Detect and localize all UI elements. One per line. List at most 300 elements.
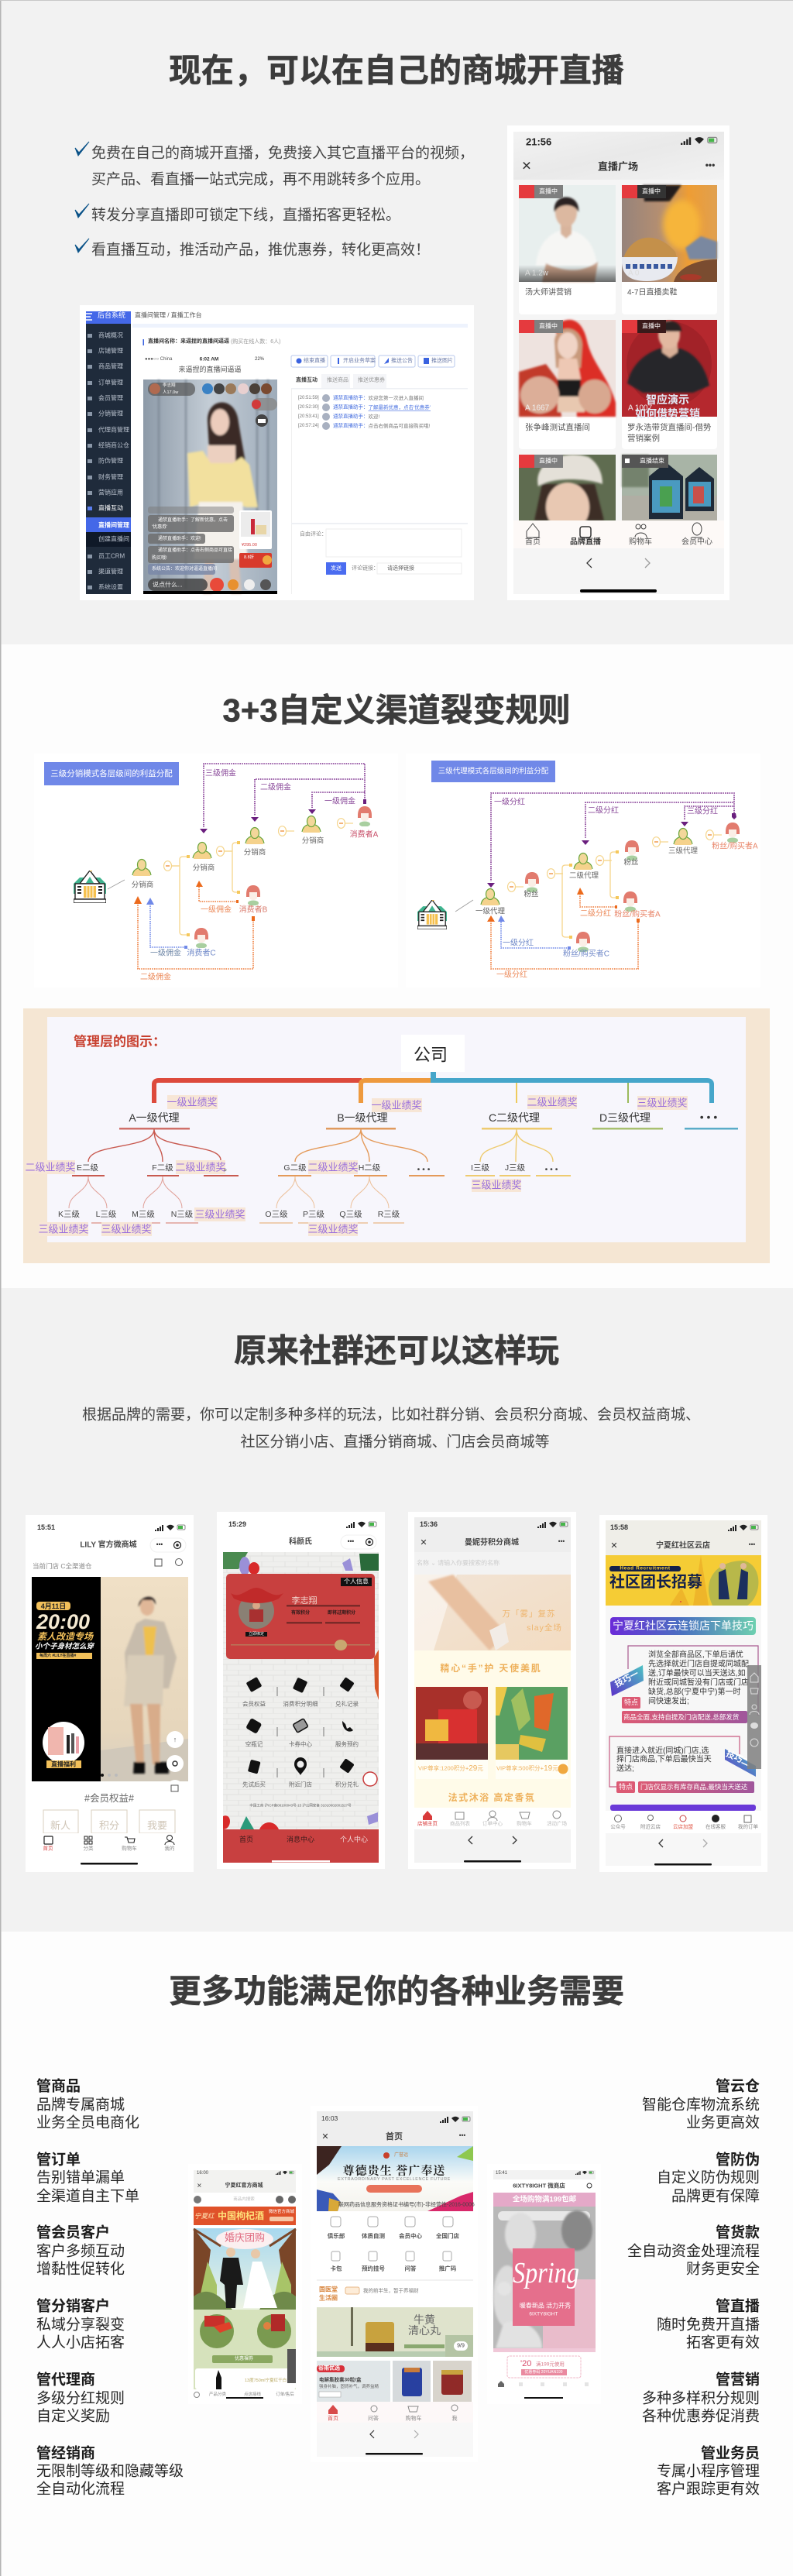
LILY member tiles: 积分	[99, 1820, 119, 1831]
pink promo bar	[493, 2193, 596, 2207]
card: lanterns	[622, 455, 717, 520]
minus circles	[508, 830, 722, 891]
sidebar: 渠道管理	[98, 567, 123, 575]
backend action buttons: 推送图片	[431, 356, 453, 364]
first level nodes	[119, 1095, 738, 1129]
sidebar: 营销应用	[98, 488, 123, 496]
text block: left feature list: 全自动化流程	[36, 2480, 125, 2497]
card: red banner speaker: 如何借势营销	[635, 407, 700, 420]
tip two: 择门店商品,下单后最快当天	[616, 1753, 712, 1764]
spring hero: 暖春新品 活力开秀	[520, 2302, 571, 2310]
text block: right feature list: 客户跟踪更有效	[657, 2480, 760, 2497]
card: hostess: A 1667	[525, 404, 550, 412]
phone: Ningxia community store: 宁夏红社区云店	[656, 1540, 710, 1551]
purple commission routes: 一级佣金	[324, 796, 355, 805]
phone: pharmacy home: 首页	[386, 2131, 403, 2142]
mall tab bar: 产品分类	[209, 2391, 226, 2397]
pink promo bar: 全场购物满199包邮	[513, 2195, 577, 2204]
icon: check 2	[75, 204, 89, 218]
first level nodes: D三级代理	[599, 1111, 651, 1124]
orange and blue return routes: 一级佣金	[150, 948, 181, 957]
agents	[475, 829, 698, 915]
text block: right feature list: 智能仓库物流系统	[642, 2096, 760, 2113]
distributors: 分销商	[193, 863, 215, 872]
spring hero: Spring	[513, 2257, 579, 2289]
text block: left feature list: 无限制等级和隐藏等级	[36, 2463, 184, 2480]
first level nodes: C二级代理	[489, 1111, 540, 1124]
text block: community intro: 根据品牌的需要，你可以定制多种多样的玩法，比如社群分销、会员积分商城、会员权益商城、	[82, 1406, 700, 1424]
third level nodes: M三级	[132, 1210, 155, 1219]
backend tabs and messages: [20:51:59]	[298, 396, 319, 400]
card: speaker	[519, 185, 616, 314]
orange and blue return routes: 一级佣金	[201, 905, 232, 914]
consumers: 消费者A	[350, 829, 379, 840]
sidebar: 分销管理	[98, 409, 123, 417]
tip one: 间快速发出;	[648, 1696, 689, 1705]
sidebar: 会员管理	[98, 393, 123, 401]
pharmacy tab bar: 我	[452, 2415, 457, 2421]
tip one: 缺货,总部(宁夏中宁)第一时	[648, 1687, 740, 1696]
yellow tree connectors	[108, 841, 240, 936]
third level nodes: 三级业绩奖	[38, 1224, 89, 1235]
phone: Kiehl's membership: •••	[348, 1538, 354, 1544]
pharmacy tab bar: 购物车	[406, 2415, 421, 2421]
sidebar: 财务管理	[98, 472, 123, 480]
phone: Maniform points mall: 曼妮芬积分商城	[465, 1537, 519, 1547]
sidebar: 系统设置	[98, 582, 123, 590]
pharmacy tab bar: 首页	[328, 2415, 338, 2421]
fans and buyers: 粉丝	[623, 858, 639, 867]
pharmacy hero: 尊德贵生 誉广奉送	[343, 2162, 445, 2178]
tab bar: 首页	[525, 536, 541, 547]
second level nodes: G二级	[283, 1163, 307, 1173]
backend tabs and messages: 推送商品	[327, 376, 348, 383]
community tab bar	[606, 1811, 761, 1833]
backend action buttons: 结束直播	[304, 356, 325, 364]
backend phone preview: 通禁直播助手：点击右侧商品可直接	[158, 547, 232, 553]
tab bar: 购物车	[629, 536, 652, 547]
red wine banner: 微信官方商城	[269, 2208, 295, 2214]
pharmacy notice row: 国医堂	[319, 2285, 338, 2293]
green product panel	[194, 2310, 296, 2389]
icon: store building	[417, 898, 447, 929]
pharmacy icon grid	[317, 2217, 473, 2281]
membership icon grid: 附近门店	[289, 1780, 312, 1788]
community tab bar: 附近云店	[640, 1823, 661, 1829]
cream promo strip with products: VIP尊享:500积分+19元	[496, 1764, 558, 1772]
community tab bar: 公众号	[610, 1823, 626, 1829]
backend phone preview: 8.8折	[244, 554, 255, 560]
distributors	[132, 816, 324, 889]
backend tabs and messages: 评论链接：	[352, 564, 379, 572]
card: food: A 0	[628, 270, 640, 277]
text block: right feature list: 管云仓	[716, 2077, 760, 2094]
backend phone preview: ¥295.00	[242, 543, 257, 548]
sidebar: 商城概况	[98, 331, 123, 339]
third level nodes: 三级业绩奖	[101, 1224, 152, 1235]
third level nodes: O三级	[265, 1210, 288, 1219]
tip two: 直接进入就近(同城)门店,选	[616, 1746, 709, 1755]
backend phone preview: 通禁直播助手：欢迎!	[158, 535, 201, 541]
heading tag: 三级分销模式各层级间的利益分配	[50, 768, 173, 778]
Kiehl's tab bar: 首页	[239, 1835, 253, 1843]
store tab bar	[498, 2381, 589, 2399]
card: red banner speaker: 营销案例	[627, 433, 660, 443]
second level nodes	[25, 1160, 571, 1192]
pharmacy icon grid: 全国门店	[436, 2232, 459, 2240]
fans and buyers: 粉丝/购买者A	[614, 909, 661, 919]
product tiles	[317, 2361, 472, 2402]
text block: left feature list: 业务全员电商化	[36, 2114, 139, 2131]
tips heading bar	[610, 1617, 756, 1635]
backend phone preview: ●●●○○ China	[145, 357, 173, 362]
text block: left feature list: 人人小店拓客	[36, 2334, 125, 2351]
third level nodes: 三级业绩奖	[307, 1224, 359, 1235]
card: food: 直播中	[642, 187, 661, 195]
member card: 李志翔	[291, 1595, 318, 1606]
cosmetic hero	[414, 1575, 571, 1650]
panel: live plaza phone: 直播广场	[598, 161, 638, 172]
LILY hero banner: 每周六 #LILY在直播#	[39, 1653, 77, 1658]
mall tab bar: 点这接线	[244, 2391, 261, 2397]
text block: left feature list: 管订单	[36, 2150, 81, 2169]
tip two: 特点	[619, 1782, 633, 1791]
pharmacy hero	[317, 2146, 475, 2211]
consumers	[187, 806, 379, 957]
membership icon grid: 会员权益	[242, 1699, 266, 1707]
text block: live streaming benefits: 看直播互动，推活动产品，推优惠券，转化更高效！	[91, 242, 430, 259]
LILY hero banner	[32, 1577, 188, 1797]
phone: Ningxia official mall: 16:00	[197, 2171, 209, 2176]
backend phone preview: 说点什么...	[153, 581, 183, 589]
sidebar: 创建直播间	[98, 534, 129, 542]
text block: left feature list: 管商品	[36, 2077, 81, 2094]
tip one: 附近或同城暂没有门店或门店	[648, 1678, 749, 1687]
backend phone preview: 6:02 AM	[200, 356, 218, 362]
recruitment banner: 社区团长招募	[609, 1573, 702, 1591]
backend tabs and messages: 直播互动	[296, 376, 318, 383]
backend tabs and messages: 自由评论：	[300, 530, 327, 538]
card: red banner speaker	[622, 320, 717, 449]
panel: live plaza phone: •••	[705, 160, 715, 170]
green product panel: 13度750ml宁夏红干白	[245, 2377, 287, 2383]
backend phone preview: 通禁直播助手：了解新优惠，点击	[158, 517, 228, 523]
pharmacy icon grid: 体质自测	[362, 2232, 385, 2240]
tip one: 先选择就近门店自提或同城配	[648, 1659, 749, 1668]
phone: Kiehl's membership	[217, 1512, 385, 1869]
LILY hero banner: 20:00	[36, 1610, 90, 1633]
pharmacy tab bar: 问答	[368, 2415, 379, 2421]
second level nodes: • • •	[417, 1165, 431, 1174]
nav arrows and home bar	[654, 1839, 712, 1865]
Maniform tab bar: 购物车	[517, 1820, 532, 1826]
third level nodes: Q三级	[339, 1210, 362, 1219]
card: red banner speaker: 罗永浩带货直播间-借势	[627, 422, 712, 432]
membership icon grid: 服务预约	[335, 1740, 359, 1747]
Kiehl's tab bar: 消息中心	[287, 1835, 314, 1843]
backend tabs and messages: 推送优惠券	[358, 376, 385, 383]
title: live streaming: 现在，可以在自己的商城开直播	[169, 53, 624, 88]
backend phone preview: 购买哦!	[152, 555, 167, 561]
text block: left feature list: 全渠道自主下单	[36, 2187, 139, 2204]
text block: left feature list: 管分销客户	[36, 2297, 110, 2314]
text block: right feature list: 管直播	[716, 2297, 760, 2314]
Kiehl's tab bar: 个人中心	[340, 1835, 368, 1843]
LILY member tiles: 新人	[50, 1820, 70, 1831]
phone: Ningxia official mall: ✕	[197, 2183, 202, 2189]
phone: 6IXTY8IGHT store: 15:41	[496, 2171, 508, 2176]
orange and blue return routes: 二级佣金	[140, 971, 171, 982]
pharmacy icon grid: 卡包	[330, 2265, 342, 2272]
product tiles: 强身补脑，固肾补气，调养益精	[319, 2383, 379, 2389]
LILY hero banner: 小个子身材怎么穿	[35, 1642, 94, 1651]
purple dividend routes	[487, 793, 736, 888]
purple dividend routes: 三级分红	[687, 805, 718, 816]
text block: right feature list: 各种优惠券促消费	[642, 2407, 760, 2424]
chart heading: 管理层的图示：	[74, 1033, 166, 1049]
card: speaker: 直播中	[539, 187, 558, 195]
LILY hero banner: 素人改造专场	[37, 1631, 94, 1642]
title: channel rules: 3+3自定义渠道裂变规则	[222, 692, 571, 728]
backend action buttons: 推送公告	[391, 356, 413, 364]
Maniform tab bar	[414, 1808, 571, 1829]
nav arrows and home bar	[580, 558, 657, 592]
fans and buyers: 粉丝	[524, 889, 539, 898]
fans and buyers: 粉丝/购买者C	[563, 948, 609, 959]
tip two: 门店仅显示有库存商品,最快当天送达	[640, 1783, 748, 1791]
backend tabs and messages: 通禁直播助手：了解最新优惠，点击'优惠券'	[333, 403, 431, 410]
second level nodes: • • •	[545, 1165, 558, 1174]
phone: Maniform points mall	[408, 1512, 576, 1869]
text block: right feature list: 自定义防伪规则	[657, 2169, 760, 2186]
panel: live console backend screenshot: 直播间名称：来逼捏的直播间逼逼 (购买在线人数：6人)	[148, 338, 281, 344]
text block: left feature list: 增黏性促转化	[36, 2260, 125, 2277]
card: red banner speaker: 智应演示	[646, 393, 689, 406]
icon: check 3	[75, 239, 89, 252]
tip two: 技巧二	[724, 1748, 752, 1768]
sidebar: 代理商管理	[98, 426, 129, 434]
sidebar: 员工CRM	[98, 553, 125, 559]
second level nodes: J三级	[505, 1163, 526, 1173]
text block: left feature list: 管经销商	[36, 2444, 95, 2461]
panel: management org chart	[23, 1008, 770, 1263]
text block: live streaming benefits: 免费在自己的商城开直播，免费接入其它直播平台的视频，	[91, 144, 474, 161]
cream promo strip with products	[414, 1650, 571, 1779]
tip two: 送达;	[616, 1763, 634, 1774]
company node	[401, 1035, 465, 1072]
phone: pharmacy home: •••	[459, 2131, 465, 2139]
text block: left feature list: 管代理商	[36, 2370, 95, 2389]
text block: right feature list: 多种多样积分规则	[642, 2390, 760, 2407]
minus circles	[164, 819, 353, 871]
text block: right feature list: 财务更安全	[686, 2260, 760, 2277]
coupon: '20	[520, 2359, 531, 2368]
backend tabs and messages: [20:52:30]	[298, 405, 319, 410]
phone: 6IXTY8IGHT store	[487, 2164, 601, 2404]
title: community play: 原来社群还可以这样玩	[234, 1332, 559, 1369]
heading tag	[431, 761, 555, 782]
card: red banner speaker: 直播中	[642, 322, 661, 330]
text block: right feature list: 管业务员	[701, 2444, 760, 2461]
LILY member tiles	[43, 1810, 175, 1833]
text block: right feature list: 管货款	[716, 2223, 760, 2241]
yellow tree connectors	[455, 850, 619, 939]
text block: right feature list: 管营销	[716, 2370, 760, 2389]
first level nodes: B一级代理	[337, 1111, 388, 1124]
backend tabs and messages: [20:57:24]	[298, 424, 319, 428]
nav arrows and home bar	[464, 1836, 521, 1862]
orange and blue return routes: 一级分红	[496, 970, 527, 979]
phone: Maniform points mall: •••	[558, 1538, 565, 1544]
sidebar: 商品管理	[98, 362, 123, 370]
second level nodes: H二级	[359, 1163, 381, 1173]
text block: left feature list: 管会员客户	[36, 2223, 110, 2241]
tip one	[610, 1646, 758, 1723]
purple dividend routes: 二级分红	[588, 805, 619, 815]
consumers: 消费者B	[239, 905, 268, 914]
card: hostess	[519, 320, 616, 449]
membership icon grid	[242, 1677, 359, 1808]
purple commission routes: 二级佣金	[260, 782, 291, 792]
phone: 6IXTY8IGHT store: 6IXTY8IGHT 微商店	[513, 2181, 565, 2189]
product tiles: 谷雨优选	[318, 2364, 340, 2372]
purple commission routes	[200, 764, 366, 833]
tip one: 浏览全部商品区,下单后请优	[648, 1650, 743, 1659]
title: more functions: 更多功能满足你的各种业务需要	[169, 1973, 624, 2009]
backend tabs and messages: 通禁直播助手：点击右侧商品可直接购买哦!	[333, 421, 431, 429]
tab bar: 会员中心	[681, 536, 712, 547]
purple commission routes: 三级佣金	[205, 768, 236, 778]
panel: live console backend screenshot	[80, 305, 474, 600]
mall tab bar	[194, 2389, 296, 2403]
second level nodes: 二级业绩奖	[175, 1162, 226, 1173]
text block: left feature list: 自定义奖励	[36, 2407, 110, 2424]
recruitment banner	[606, 1555, 761, 1606]
backend tabs and messages: 通禁直播助手：欢迎您第一次进入直播间	[333, 393, 424, 401]
LILY hero banner: ↑	[173, 1736, 177, 1743]
phone: LILY mall: 当前门店 C全渠道仓	[33, 1562, 92, 1570]
LILY tab bar: 分类	[84, 1845, 94, 1851]
tip one: 特点	[624, 1698, 638, 1706]
agents: 三级代理	[668, 846, 698, 855]
agents: 二级代理	[569, 871, 599, 880]
backend tabs and messages: 通禁直播助手：欢迎!	[333, 412, 379, 420]
membership icon grid: 中国工商 沪ICP备08100043号-15 沪公网安备 31010602001527号	[249, 1803, 352, 1808]
orange and blue return routes: 二级分红	[580, 908, 611, 919]
fans and buyers: 粉丝/购买者A	[712, 841, 758, 850]
Maniform tab bar: 商品列表	[450, 1820, 471, 1826]
pharmacy notice row: 生活圈	[319, 2294, 338, 2302]
card: hostess: 张争峰测试直播间	[525, 422, 590, 432]
third level nodes: 三级业绩奖	[194, 1208, 245, 1221]
sidebar: 店铺管理	[98, 347, 123, 355]
third level nodes: N三级	[171, 1210, 194, 1219]
text block: live streaming benefits: 买产品、看直播一站式完成，再不用跳转多个应用。	[91, 170, 430, 187]
second level nodes: 二级业绩奖	[25, 1162, 76, 1173]
text block: right feature list: 全自动资金处理流程	[627, 2243, 760, 2260]
LILY hero banner: 4月11日	[41, 1602, 66, 1610]
Maniform tab bar: 活动广场	[547, 1820, 567, 1826]
membership icon grid: 空瓶记	[245, 1740, 263, 1747]
sidebar: 后台系统	[98, 311, 125, 319]
card: speaker: 汤大师讲营销	[525, 287, 572, 297]
red wine banner: 中国枸杞酒	[218, 2210, 264, 2221]
pharmacy notice row	[319, 2285, 419, 2302]
membership icon grid: 消费积分明细	[283, 1699, 318, 1707]
coupon: 满199元使用	[536, 2361, 565, 2367]
membership icon grid: 兑礼记录	[335, 1699, 359, 1707]
sidebar	[86, 311, 131, 594]
phone: LILY mall: #会员权益#	[84, 1792, 134, 1804]
backend phone preview: 人17.0w	[163, 390, 178, 395]
coupon: 优惠券码 20YUAN199	[524, 2369, 563, 2375]
pharmacy hero: 广誉远	[394, 2152, 408, 2158]
sidebar: 直播间管理	[98, 520, 129, 528]
third level nodes: L三级	[96, 1210, 117, 1219]
nav arrows and home bar	[317, 2423, 473, 2457]
panel: live plaza phone	[507, 125, 729, 600]
distributors: 分销商	[302, 836, 324, 846]
first level nodes: 一级业绩奖	[166, 1097, 218, 1108]
member card: 个人信息	[344, 1577, 369, 1585]
membership icon grid: 卡券中心	[289, 1740, 312, 1747]
second level nodes: I三级	[471, 1163, 489, 1173]
sidebar: 直播互动	[98, 503, 123, 511]
floating side toolbar	[747, 1665, 761, 1769]
wedding illustration: 婚庆团购	[225, 2232, 265, 2243]
product hero: 清心丸	[408, 2324, 441, 2337]
product tiles: 电解集胶囊30粒/盒	[319, 2376, 362, 2382]
tip one: 技巧一	[613, 1668, 640, 1689]
pharmacy icon grid: 问答	[404, 2265, 417, 2272]
phone: Maniform points mall: 名称 ⌄ 请输入你要搜索的名称	[417, 1558, 499, 1566]
second level branches	[88, 1129, 553, 1162]
orange and blue return routes: 一级分红	[503, 937, 534, 948]
tip one: 商品全面,支持自提及门店配送,总部发货	[623, 1713, 740, 1721]
tip two	[609, 1736, 756, 1793]
card: food	[622, 185, 717, 314]
first level nodes: • • •	[700, 1111, 717, 1123]
phone: Kiehl's membership: 科颜氏	[289, 1537, 312, 1546]
company node: 公司	[414, 1046, 448, 1064]
tab bar	[513, 520, 724, 548]
third level branches	[69, 1176, 389, 1208]
spring hero	[493, 2207, 596, 2352]
text block: right feature list	[627, 2077, 760, 2497]
pharmacy icon grid: 推广码	[439, 2265, 457, 2272]
heading tag	[44, 762, 179, 785]
community tab bar: 在线客服	[705, 1823, 726, 1829]
backend tabs and messages	[291, 374, 468, 594]
orange and blue return routes	[134, 881, 255, 982]
card: lanterns: 直播结束	[640, 457, 664, 465]
member card: 有效积分	[291, 1609, 310, 1616]
card: hostess: 直播中	[539, 322, 558, 330]
LILY tab bar	[32, 1833, 188, 1865]
orange and blue return routes	[487, 888, 640, 979]
panel: three-level distribution diagram	[34, 754, 398, 987]
card: speaker: A 1.2w	[525, 270, 549, 277]
membership icon grid: 积分兑礼	[335, 1780, 359, 1788]
pharmacy icon grid: 俱乐部	[328, 2232, 345, 2240]
phone: LILY mall: LILY 官方微商城	[80, 1540, 137, 1549]
card: food: 4-7日直播卖鞋	[627, 287, 677, 297]
text block: left feature list: 告别错单漏单	[36, 2169, 125, 2186]
backend tabs and messages: [20:53:41]	[298, 414, 319, 419]
text block: right feature list: 拓客更有效	[686, 2334, 760, 2351]
first level nodes: A一级代理	[129, 1111, 180, 1124]
pharmacy hero: EXTRAORDINARY PAST EXCELLENCE FUTURE	[338, 2177, 451, 2182]
